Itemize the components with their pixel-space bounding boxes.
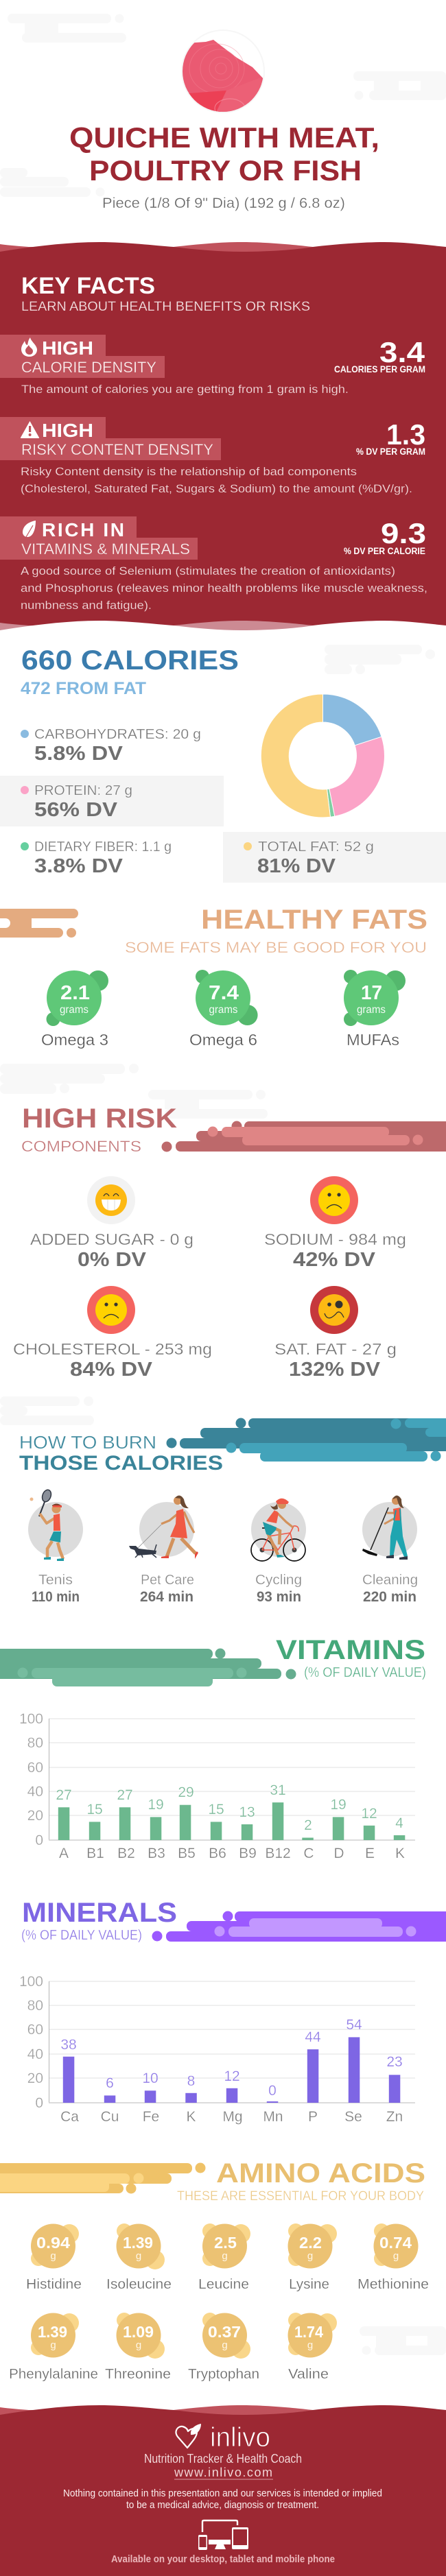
heading: HOW TO BURN	[19, 1432, 156, 1453]
bar chart: vitamins: 60	[27, 1760, 43, 1776]
fact: calorie density: The amount of calories you are getting from 1 gram is high.	[21, 383, 349, 396]
mufas: MUFAs	[347, 1031, 399, 1049]
added sugar: ADDED SUGAR - 0 g	[30, 1230, 193, 1248]
bar chart: vitamins: 15	[208, 1802, 224, 1817]
bar chart: vitamins: 0	[35, 1833, 43, 1848]
heading: HEALTHY FATS	[201, 905, 427, 935]
added sugar	[30, 1176, 193, 1271]
omega 3: 2.1	[60, 982, 90, 1004]
subheading: THESE ARE ESSENTIAL FOR YOUR BODY	[177, 2189, 424, 2204]
title	[69, 121, 379, 187]
bar chart: vitamins: 19	[330, 1797, 347, 1813]
activity: tennis: 110 min	[32, 1589, 80, 1605]
legend: carbohydrates: CARBOHYDRATES: 20 g	[34, 727, 201, 742]
fact: calorie density: 3.4	[379, 336, 425, 368]
disclaimer: to be a medical advice, diagnosis or treatment.	[126, 2500, 319, 2511]
omega 6: 7.4	[209, 982, 239, 1004]
legend: protein	[0, 776, 224, 826]
cholesterol: CHOLESTEROL - 253 mg	[13, 1340, 212, 1358]
bar chart: vitamins: 40	[27, 1784, 43, 1800]
food image: tuna steak	[181, 29, 265, 113]
heading: 660 calories: 660 CALORIES	[21, 645, 239, 676]
valine: Valine	[288, 2367, 329, 2382]
panel: calories	[0, 645, 446, 883]
saturated fat: 132% DV	[289, 1359, 381, 1381]
activity: tennis: Tenis	[38, 1573, 73, 1588]
bar chart: vitamins: B12	[265, 1846, 291, 1861]
isoleucine: Isoleucine	[106, 2277, 172, 2292]
fact: risky content density: HIGH	[42, 420, 93, 441]
legend: total fat	[223, 832, 446, 883]
fact: risky content density: RISKY CONTENT DENSITY	[21, 441, 213, 458]
decorative red cloud	[162, 1121, 446, 1152]
bar chart: vitamins: E	[365, 1846, 375, 1861]
bar chart: minerals: 6	[106, 2075, 114, 2091]
panel: high risk components	[13, 1104, 446, 1381]
fact: risky content density	[0, 417, 425, 495]
fact: rich in vitamins and minerals: A good source of Selenium (stimulates the creation of antioxidants)	[21, 564, 395, 577]
heading: AMINO ACIDS	[216, 2158, 425, 2189]
disclaimer: Nothing contained in this presentation and our services is intended or implied	[63, 2488, 382, 2499]
fact: rich in vitamins and minerals: VITAMINS & MINERALS	[21, 540, 190, 558]
histidine	[26, 2223, 82, 2292]
panel: healthy fats	[0, 905, 427, 1049]
subheading: SOME FATS MAY BE GOOD FOR YOU	[125, 939, 427, 956]
legend: carbohydrates	[21, 727, 201, 765]
bar chart: vitamins: B5	[178, 1846, 196, 1861]
added sugar: 0% DV	[78, 1249, 147, 1271]
mufas: 17	[361, 982, 382, 1004]
bar chart: vitamins: B1	[86, 1846, 104, 1861]
methionine: 0.74	[379, 2234, 412, 2252]
legend: total fat: TOTAL FAT: 52 g	[258, 839, 374, 855]
bar chart: vitamins: B9	[239, 1846, 257, 1861]
bar chart: minerals: 8	[187, 2073, 195, 2089]
methionine: Methionine	[357, 2277, 429, 2292]
title: POULTRY OR FISH	[89, 154, 362, 187]
fact: calorie density	[0, 335, 425, 396]
isoleucine: 1.39	[123, 2234, 153, 2252]
bar chart: minerals: 0	[268, 2083, 277, 2099]
bar chart: minerals: 38	[60, 2037, 77, 2053]
bar chart: minerals: 10	[142, 2071, 159, 2086]
bar chart: minerals: Cu	[101, 2109, 119, 2125]
legend: protein: 56% DV	[34, 799, 118, 821]
lysine: Lysine	[289, 2277, 329, 2292]
brand name: inlivo	[210, 2422, 270, 2453]
bar chart: vitamins: C	[303, 1846, 314, 1861]
activity: pet care: 264 min	[140, 1589, 193, 1605]
tryptophan: g	[222, 2339, 228, 2351]
lysine: g	[307, 2250, 313, 2262]
legend: protein: PROTEIN: 27 g	[34, 783, 132, 798]
activity: tennis	[28, 1488, 83, 1605]
histidine: g	[50, 2250, 56, 2262]
bar chart: minerals: 80	[27, 1998, 43, 2014]
icon: devices	[198, 2520, 248, 2550]
bar chart: vitamins: 100	[19, 1711, 43, 1727]
sodium: SODIUM - 984 mg	[264, 1230, 406, 1248]
threonine: Threonine	[105, 2367, 171, 2382]
legend: dietary fiber: DIETARY FIBER: 1.1 g	[34, 839, 172, 855]
availability note: Available on your desktop, tablet and mobile phone	[111, 2553, 335, 2565]
bar chart: vitamins: B2	[117, 1846, 135, 1861]
disclaimer	[63, 2488, 382, 2511]
activity: cycling: 93 min	[257, 1589, 301, 1605]
tryptophan: Tryptophan	[188, 2367, 259, 2382]
lysine	[288, 2223, 337, 2292]
subheading: (% OF DAILY VALUE)	[304, 1665, 426, 1680]
mufas: grams	[357, 1004, 386, 1016]
phenylalanine: 1.39	[38, 2323, 67, 2341]
tryptophan	[188, 2313, 259, 2382]
icon: warning	[21, 421, 39, 438]
omega 6: grams	[209, 1004, 238, 1016]
bar chart: vitamins: 80	[27, 1735, 43, 1751]
sodium	[264, 1176, 406, 1271]
heading: VITAMINS	[276, 1635, 425, 1665]
fact: risky content density: (Cholesterol, Saturated Fat, Sugars & Sodium) to the amount (%DV/gr).	[21, 482, 412, 495]
bar chart: minerals: Fe	[143, 2109, 159, 2125]
isoleucine	[106, 2223, 172, 2292]
cholesterol	[13, 1286, 212, 1381]
saturated fat	[274, 1286, 397, 1381]
methionine: g	[393, 2250, 399, 2262]
bar chart: vitamins: 31	[270, 1782, 286, 1798]
methionine	[357, 2223, 429, 2292]
website: www.inlivo.com	[174, 2466, 272, 2479]
bar chart: vitamins: 13	[239, 1804, 255, 1820]
bar chart: minerals	[19, 1974, 415, 2125]
mufas	[344, 970, 406, 1049]
bar chart: minerals: K	[186, 2109, 196, 2125]
icon: dog	[129, 1545, 156, 1558]
bar chart: minerals: P	[308, 2109, 318, 2125]
legend: dietary fiber	[21, 839, 172, 877]
bar chart: minerals: 12	[224, 2068, 240, 2084]
bar chart: minerals: Mg	[222, 2109, 243, 2125]
fact: risky content density: % DV PER GRAM	[356, 446, 425, 457]
bar chart: vitamins: 12	[361, 1806, 377, 1822]
fact: calorie density: CALORIE DENSITY	[21, 359, 156, 376]
bar chart: minerals: 0	[35, 2095, 43, 2111]
bar chart: vitamins: 4	[395, 1815, 403, 1831]
panel: minerals	[19, 1898, 446, 2125]
fact: rich in vitamins and minerals: % DV PER CALORIE	[344, 546, 425, 556]
omega 3: Omega 3	[41, 1031, 108, 1049]
bar chart: vitamins: B6	[209, 1846, 226, 1861]
omega 3: grams	[60, 1004, 89, 1016]
bar chart: minerals: Se	[344, 2109, 362, 2125]
panel: how to burn those calories	[19, 1418, 446, 1605]
bar chart: minerals: Zn	[386, 2109, 403, 2125]
decorative teal cloud	[166, 1418, 446, 1462]
activity: pet care: Pet Care	[141, 1573, 194, 1588]
panel: vitamins	[0, 1635, 426, 1861]
bar chart: vitamins: K	[395, 1846, 405, 1861]
legend: carbohydrates: 5.8% DV	[34, 743, 124, 765]
heading: key facts: KEY FACTS	[21, 273, 155, 299]
valine	[288, 2313, 337, 2382]
fact: rich in vitamins and minerals: RICH IN	[42, 519, 124, 540]
cholesterol: 84% DV	[70, 1359, 153, 1381]
activity: cleaning	[362, 1495, 418, 1605]
bar chart: minerals: 20	[27, 2071, 43, 2086]
legend: total fat: 81% DV	[257, 855, 336, 877]
panel: key facts	[0, 242, 446, 634]
bar chart: minerals: 54	[346, 2017, 362, 2033]
bar chart: vitamins: 2	[304, 1817, 312, 1833]
fact: calorie density: HIGH	[42, 337, 93, 359]
bar chart: minerals: Ca	[60, 2109, 79, 2125]
bar chart: minerals: Mn	[263, 2109, 283, 2125]
wave top	[0, 242, 446, 256]
phenylalanine	[9, 2313, 98, 2382]
bar chart: vitamins: 29	[178, 1785, 194, 1800]
bar chart: minerals: 40	[27, 2047, 43, 2062]
icon: bicycle	[251, 1526, 305, 1561]
subheading: (% OF DAILY VALUE)	[21, 1928, 142, 1943]
panel: footer	[0, 2405, 446, 2576]
valine: 1.74	[294, 2323, 323, 2341]
fact: rich in vitamins and minerals: 9.3	[381, 517, 426, 549]
activity: cycling	[251, 1499, 306, 1605]
histidine: 0.94	[36, 2234, 70, 2252]
threonine: g	[136, 2339, 141, 2351]
icon: sad face	[318, 1184, 350, 1216]
icon: broom	[362, 1507, 388, 1556]
subheading: LEARN ABOUT HEALTH BENEFITS OR RISKS	[21, 299, 310, 314]
omega 6	[189, 970, 258, 1049]
icon: sad face	[95, 1294, 127, 1326]
bar chart: vitamins: D	[333, 1846, 344, 1861]
decorative purple cloud	[152, 1911, 446, 1942]
decorative green cloud	[0, 1649, 296, 1686]
decorative orange cloud	[0, 909, 78, 938]
wave bottom	[0, 621, 446, 634]
sodium: 42% DV	[293, 1249, 376, 1271]
bar chart: minerals: 100	[19, 1974, 43, 1990]
bar chart: vitamins: 27	[117, 1787, 133, 1803]
bar chart: vitamins: 20	[27, 1808, 43, 1824]
activity: cycling: Cycling	[255, 1573, 302, 1588]
bar chart: vitamins: 19	[148, 1797, 164, 1813]
heading: HIGH RISK	[22, 1104, 177, 1134]
omega 3	[41, 970, 108, 1049]
bar chart: vitamins	[19, 1711, 415, 1861]
lysine: 2.2	[299, 2234, 322, 2252]
bar chart: minerals: 23	[386, 2054, 403, 2070]
bar chart: vitamins: 27	[56, 1787, 72, 1803]
donut chart	[261, 694, 384, 818]
wave	[0, 2405, 446, 2419]
phenylalanine: Phenylalanine	[9, 2367, 98, 2382]
activity: pet care	[129, 1495, 198, 1605]
activity: cleaning: Cleaning	[362, 1573, 418, 1588]
leucine: Leucine	[198, 2277, 249, 2292]
icon: grin face	[95, 1184, 127, 1216]
omega 6: Omega 6	[189, 1031, 257, 1049]
fact: risky content density: Risky Content density is the relationship of bad components	[21, 465, 357, 478]
heading: THOSE CALORIES	[19, 1452, 223, 1475]
bar chart: vitamins: A	[59, 1846, 69, 1861]
legend: dietary fiber: 3.8% DV	[34, 855, 124, 877]
histidine: Histidine	[26, 2277, 82, 2292]
tryptophan: 0.37	[208, 2323, 241, 2341]
subheading: COMPONENTS	[21, 1138, 141, 1155]
icon: queasy face	[318, 1294, 350, 1326]
heading: MINERALS	[22, 1898, 177, 1928]
fact: risky content density: 1.3	[386, 418, 425, 451]
heading	[19, 1432, 223, 1475]
leucine: g	[222, 2250, 228, 2262]
icon: leaf	[23, 521, 36, 537]
title: QUICHE WITH MEAT,	[69, 121, 379, 154]
leucine	[198, 2223, 250, 2292]
fact: rich in vitamins and minerals	[0, 516, 427, 612]
tagline: Nutrition Tracker & Health Coach	[144, 2452, 302, 2466]
threonine	[105, 2313, 171, 2382]
decorative yellow cloud	[0, 2163, 206, 2193]
isoleucine: g	[136, 2250, 141, 2262]
bar chart: vitamins: B3	[148, 1846, 165, 1861]
leucine: 2.5	[214, 2234, 237, 2252]
icon: flame	[21, 337, 37, 357]
phenylalanine: g	[50, 2339, 56, 2351]
bar chart: minerals: 60	[27, 2022, 43, 2038]
bar chart: minerals: 44	[305, 2029, 321, 2045]
saturated fat: SAT. FAT - 27 g	[274, 1340, 397, 1358]
icon: inlivo heart logo	[176, 2424, 201, 2448]
fact: rich in vitamins and minerals: numbness and fatigue).	[21, 599, 152, 612]
fact: rich in vitamins and minerals: and Phosphorus (releaves minor health problems like muscle weakness,	[21, 582, 427, 595]
serving size subtitle: Piece (1/8 Of 9" Dia) (192 g / 6.8 oz)	[102, 195, 345, 211]
icon: racket	[39, 1488, 53, 1516]
valine: g	[307, 2339, 313, 2351]
fact: calorie density: CALORIES PER GRAM	[334, 364, 425, 374]
threonine: 1.09	[123, 2323, 154, 2341]
panel: amino acids	[0, 2158, 429, 2382]
activity: cleaning: 220 min	[363, 1589, 416, 1605]
subheading: from fat: 472 FROM FAT	[21, 679, 146, 698]
bar chart: vitamins: 15	[86, 1802, 103, 1817]
